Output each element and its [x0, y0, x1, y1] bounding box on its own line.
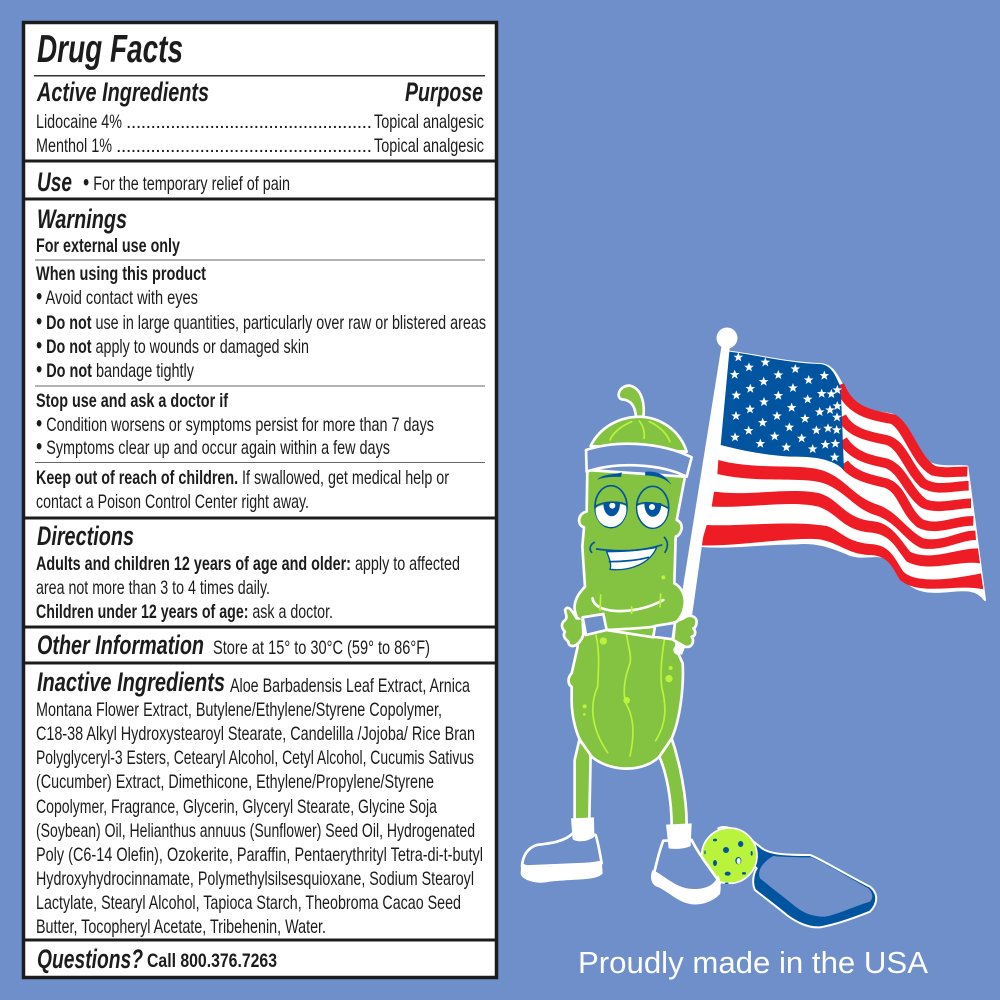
crossed arms: [574, 583, 685, 637]
section: warnings: • Avoid contact with eyes: [36, 283, 198, 310]
section: active ingredients and purpose: Topical analgesic: [374, 111, 484, 133]
section: inactive ingredients: Poly (C6-14 Olefin), Ozokerite, Paraffin, Pentaerythrityl Tetra-di-t-butyl: [36, 844, 483, 866]
face: [590, 472, 671, 570]
section: directions: [36, 521, 460, 623]
section: inactive ingredients: Hydroxyhydrocinnamate, Polymethylsilsesquioxane, Sodium Stearoyl: [36, 868, 474, 890]
section: directions: Directions: [37, 521, 134, 551]
body: [569, 470, 685, 769]
section: active ingredients and purpose: Topical analgesic: [374, 135, 484, 157]
section: use: • For the temporary relief of pain: [83, 169, 290, 196]
section: use: Use: [37, 167, 72, 197]
section: inactive ingredients: Copolymer, Fragrance, Glycerin, Glyceryl Stearate, Glycine Soja: [36, 796, 437, 818]
belly ridges and dots: [583, 575, 673, 756]
section: inactive ingredients: Lactylate, Stearyl Alcohol, Tapioca Starch, Theobroma Cacao Seed: [36, 892, 461, 914]
icon: pole of flag: [673, 328, 738, 655]
section: active ingredients and purpose: Active Ingredients: [36, 77, 209, 107]
section: directions: Adults and children 12 years of age and older: apply to affected: [36, 553, 460, 575]
section: warnings: Stop use and ask a doctor if: [36, 391, 229, 412]
section: active ingredients and purpose: [36, 77, 484, 157]
hand grip on pole: [673, 645, 683, 655]
section: directions: Children under 12 years of age: ask a doctor.: [36, 601, 333, 623]
section: warnings: • Symptoms clear up and occur again within a few days: [36, 433, 390, 460]
icon: waving American flag: [700, 352, 985, 600]
stem and cap: [591, 386, 687, 452]
section: directions: area not more than 3 to 4 times daily.: [36, 577, 270, 599]
section: other information: Other Information: [37, 630, 204, 660]
legs: [575, 738, 687, 827]
section: warnings: [36, 204, 486, 513]
section: questions: [37, 944, 277, 974]
headband: [586, 444, 692, 477]
right hand: [673, 616, 697, 647]
section: inactive ingredients: C18-38 Alkyl Hydroxystearoyl Stearate, Candelilla /Jojoba/ Rice Bran: [36, 723, 475, 745]
section: warnings: contact a Poison Control Center right away.: [36, 491, 309, 513]
icon: pickleball: [702, 828, 757, 884]
section: questions: Call 800.376.7263: [147, 951, 277, 972]
section: warnings: • Do not apply to wounds or damaged skin: [36, 332, 309, 359]
section: inactive ingredients: Inactive Ingredients: [37, 667, 225, 697]
section: inactive ingredients: (Soybean) Oil, Helianthus annuus (Sunflower) Seed Oil, Hydrogenated: [36, 820, 475, 842]
section: inactive ingredients: Butter, Tocopheryl Acetate, Tribehenin, Water.: [36, 916, 326, 938]
section: warnings: • Do not bandage tightly: [36, 356, 194, 383]
section: warnings: When using this product: [36, 264, 207, 285]
wrist cuffs: [583, 614, 675, 639]
section: active ingredients and purpose: ....................................................: [116, 135, 372, 157]
section: other information: Store at 15° to 30°C (59° to 86°F): [213, 637, 430, 659]
section: active ingredients and purpose: Lidocaine 4%: [36, 111, 122, 133]
heading: Drug Facts: Drug Facts: [37, 28, 183, 71]
section: warnings: Warnings: [37, 204, 127, 234]
left hand: [562, 608, 583, 646]
left shoe: [521, 817, 603, 883]
section: active ingredients and purpose: Purpose: [405, 77, 483, 107]
section: inactive ingredients: Polyglyceryl-3 Esters, Cetearyl Alcohol, Cetyl Alcohol, Cucumis Sativus: [36, 747, 474, 769]
section: inactive ingredients: Aloe Barbadensis Leaf Extract, Arnica: [230, 675, 470, 697]
panel: drug facts label: [24, 22, 496, 978]
icon: paddle: [718, 827, 876, 927]
section: warnings: • Do not use in large quantities, particularly over raw or blistered areas: [36, 308, 486, 335]
pickle character: [521, 386, 721, 904]
section: warnings: For external use only: [36, 236, 180, 257]
section: inactive ingredients: (Cucumber) Extract, Dimethicone, Ethylene/Propylene/Styrene: [36, 771, 434, 793]
section: inactive ingredients: [36, 667, 483, 938]
section: questions: Questions?: [37, 944, 143, 974]
section: use: [37, 167, 290, 197]
section: warnings: Keep out of reach of children. If swallowed, get medical help or: [36, 467, 449, 489]
section: warnings: • Condition worsens or symptoms persist for more than 7 days: [36, 410, 434, 437]
section: active ingredients and purpose: Menthol 1%: [36, 135, 112, 157]
right shoe: [651, 823, 721, 904]
caption: Proudly made in the USA: [578, 945, 928, 980]
section: inactive ingredients: Montana Flower Extract, Butylene/Ethylene/Styrene Copolymer,: [36, 699, 442, 721]
section: active ingredients and purpose: ..................................................: [126, 111, 372, 133]
section: other information: [37, 630, 430, 660]
